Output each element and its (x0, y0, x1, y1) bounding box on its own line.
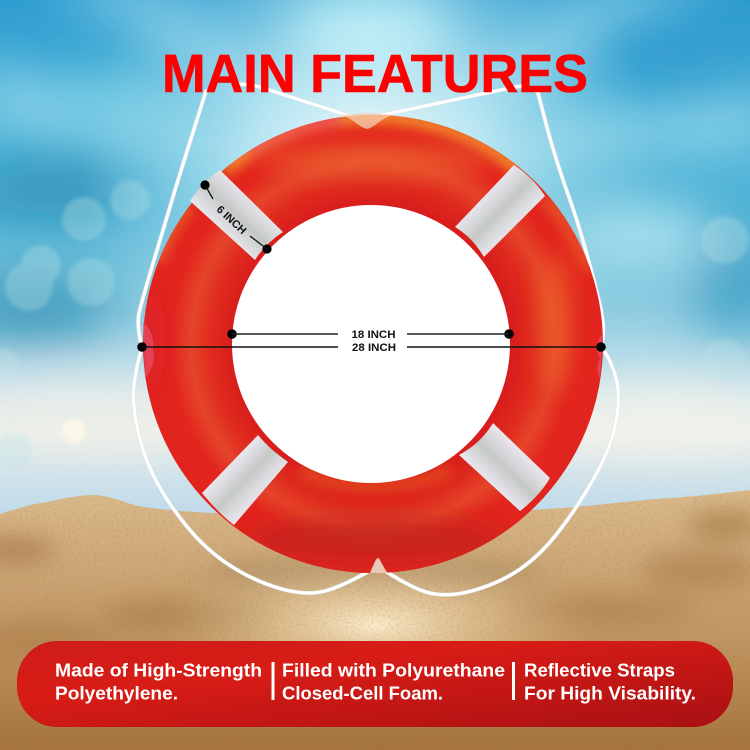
hole of the lifebuoy (231, 204, 511, 484)
reflective straps (190, 165, 550, 525)
feature: foam (282, 660, 505, 704)
measurement: 28 inch: 28 INCH (352, 342, 396, 354)
notch left (143, 322, 154, 378)
feature: material (55, 660, 262, 704)
measurement: 28 inch (137, 342, 606, 354)
feature: material: Made of High-Strength (55, 660, 262, 680)
feature: straps (524, 660, 696, 704)
measurement: 18 inch: 18 INCH (352, 329, 396, 341)
strap: bottom right (459, 423, 550, 511)
measurement: 6 inch: 6 INCH (214, 204, 248, 237)
feature banner (17, 641, 733, 727)
notch bottom (370, 558, 388, 573)
rope (133, 84, 618, 595)
feature: foam: Filled with Polyurethane (282, 660, 505, 680)
feature: material: Polyethylene. (55, 682, 178, 704)
strap: top left (190, 170, 283, 260)
feature: straps: Reflective Straps (524, 660, 675, 680)
strap: top right (455, 165, 545, 257)
title: MAIN FEATURES (162, 44, 588, 104)
strap: bottom left (202, 435, 288, 525)
measurement: 6 inch (200, 180, 272, 254)
lifebuoy ring (142, 113, 603, 573)
notch top (340, 113, 394, 129)
feature: straps: For High Visability. (524, 682, 696, 704)
feature: foam: Closed-Cell Foam. (282, 682, 443, 704)
measurement: 18 inch (227, 329, 514, 341)
notch right (597, 334, 603, 378)
